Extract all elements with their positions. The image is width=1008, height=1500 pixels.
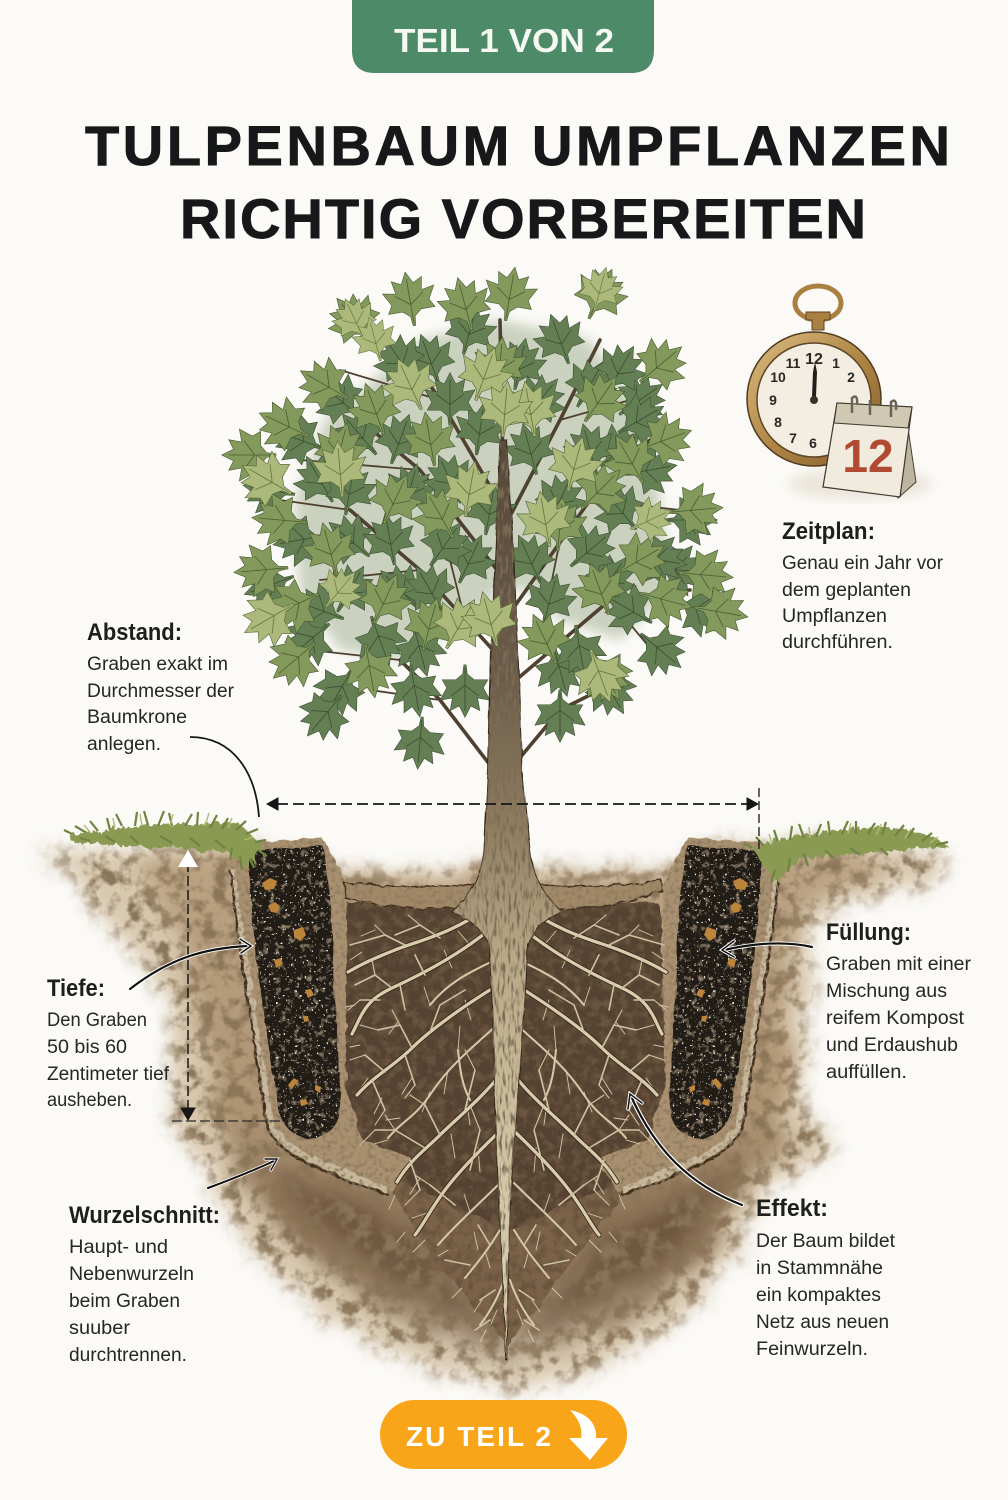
mid leaves bbox=[222, 258, 752, 713]
label: Zeitplan: Zeitplan: bbox=[782, 518, 875, 545]
trunk and taproot bbox=[452, 440, 562, 1360]
button: Zu Teil 2: ZU TEIL 2 bbox=[406, 1421, 551, 1452]
watch: 2 bbox=[847, 369, 855, 385]
pocket watch and calendar bbox=[747, 286, 932, 500]
crown underlay bbox=[295, 320, 670, 660]
dark leaves bbox=[236, 297, 734, 771]
label: Füllung: auffüllen. bbox=[826, 1062, 907, 1083]
label: Abstand: Baumkrone bbox=[87, 707, 187, 728]
icon: down arrow bbox=[569, 1410, 608, 1460]
label: Abstand: Abstand: bbox=[87, 619, 182, 646]
label: Tiefe: Den Graben bbox=[47, 1010, 147, 1031]
arrow: Abstand bbox=[190, 737, 259, 817]
roots right bbox=[510, 905, 668, 1342]
label: Füllung: Mischung aus bbox=[826, 981, 947, 1002]
label: Tiefe: ausheben. bbox=[47, 1090, 132, 1111]
label: Tiefe: Tiefe: bbox=[47, 975, 105, 1002]
watch bbox=[747, 286, 881, 466]
watch: 6 bbox=[809, 435, 817, 451]
watch: 1 bbox=[832, 355, 840, 371]
measuring line: Abstand bbox=[267, 788, 759, 850]
label: Tiefe: 50 bis 60 bbox=[47, 1037, 127, 1058]
label: Füllung bbox=[826, 919, 972, 1083]
depth dimension bbox=[172, 850, 285, 1121]
right grass bbox=[744, 821, 948, 882]
soil cross-section bbox=[50, 842, 955, 1392]
label: Effekt: Effekt: bbox=[756, 1195, 828, 1222]
arrow: Wurzelschnitt bbox=[208, 1159, 277, 1188]
root ball lower wedge bbox=[370, 1150, 640, 1345]
label: Abstand: Graben exakt im bbox=[87, 654, 228, 675]
watch: 9 bbox=[769, 392, 777, 408]
title: RICHTIG VORBEREITEN bbox=[180, 187, 866, 250]
watch: 7 bbox=[789, 430, 797, 446]
title: TULPENBAUM UMPFLANZEN bbox=[85, 114, 950, 177]
right trench with filling bbox=[598, 838, 784, 1195]
calendar: 12 bbox=[842, 430, 894, 482]
label: Effekt: ein kompaktes bbox=[756, 1285, 881, 1306]
label: Füllung: und Erdaushub bbox=[826, 1035, 958, 1056]
header tab: Teil 1 von 2 bbox=[352, 0, 654, 73]
label: Abstand: Durchmesser der bbox=[87, 681, 235, 702]
title bbox=[85, 114, 950, 250]
button: Zu Teil 2 bbox=[380, 1400, 627, 1469]
label: Wurzelschnitt: durchtrennen. bbox=[69, 1345, 187, 1366]
ground shadow bbox=[788, 468, 932, 500]
roots left bbox=[346, 905, 504, 1342]
label: Zeitplan bbox=[782, 518, 944, 653]
label: Tiefe: Zentimeter tief bbox=[47, 1064, 170, 1085]
label: Effekt: Netz aus neuen bbox=[756, 1312, 889, 1333]
label: Effekt: Der Baum bildet bbox=[756, 1231, 896, 1252]
left grass bbox=[64, 811, 267, 870]
label: Wurzelschnitt: Nebenwurzeln bbox=[69, 1264, 194, 1285]
watch: 11 bbox=[786, 355, 801, 371]
label: Wurzelschnitt: beim Graben bbox=[69, 1291, 180, 1312]
arrow: Füllung bbox=[722, 941, 812, 957]
label: Wurzelschnitt: Haupt- und bbox=[69, 1237, 168, 1258]
mid soil bbox=[135, 850, 900, 1362]
watch: 12 bbox=[805, 351, 823, 368]
label: Wurzelschnitt: suuber bbox=[69, 1318, 131, 1339]
watch: 8 bbox=[774, 414, 782, 430]
header tab: Teil 1 von 2: TEIL 1 VON 2 bbox=[394, 22, 614, 59]
label: Wurzelschnitt bbox=[69, 1202, 220, 1366]
label: Füllung: reifem Kompost bbox=[826, 1008, 965, 1029]
branches bbox=[280, 320, 690, 765]
pale outer soil bbox=[50, 842, 955, 1392]
label: Füllung: Füllung: bbox=[826, 919, 911, 946]
label: Effekt: Feinwurzeln. bbox=[756, 1339, 868, 1360]
light leaves bbox=[229, 262, 680, 712]
plateau around the trunk bbox=[345, 880, 662, 909]
left trench with filling bbox=[226, 838, 412, 1195]
label: Füllung: Graben mit einer bbox=[826, 954, 972, 975]
label: Abstand: anlegen. bbox=[87, 734, 161, 755]
label: Tiefe bbox=[47, 975, 170, 1111]
label: Abstand bbox=[87, 619, 235, 755]
label: Zeitplan: durchführen. bbox=[782, 632, 893, 653]
watch: 10 bbox=[770, 369, 786, 385]
tree crown and trunk bbox=[222, 258, 752, 1360]
label: Effekt bbox=[756, 1195, 896, 1360]
label: Zeitplan: Genau ein Jahr vor bbox=[782, 553, 944, 574]
lower dark soil bbox=[270, 1160, 745, 1340]
label: Zeitplan: dem geplanten bbox=[782, 580, 911, 601]
label: Effekt: in Stammnähe bbox=[756, 1258, 883, 1279]
label: Zeitplan: Umpflanzen bbox=[782, 606, 887, 627]
calendar bbox=[823, 397, 916, 498]
label: Wurzelschnitt: Wurzelschnitt: bbox=[69, 1202, 220, 1229]
arrow: Effekt bbox=[628, 1094, 742, 1205]
root ball dark soil bbox=[345, 903, 668, 1230]
arrow: Tiefe bbox=[130, 939, 251, 989]
